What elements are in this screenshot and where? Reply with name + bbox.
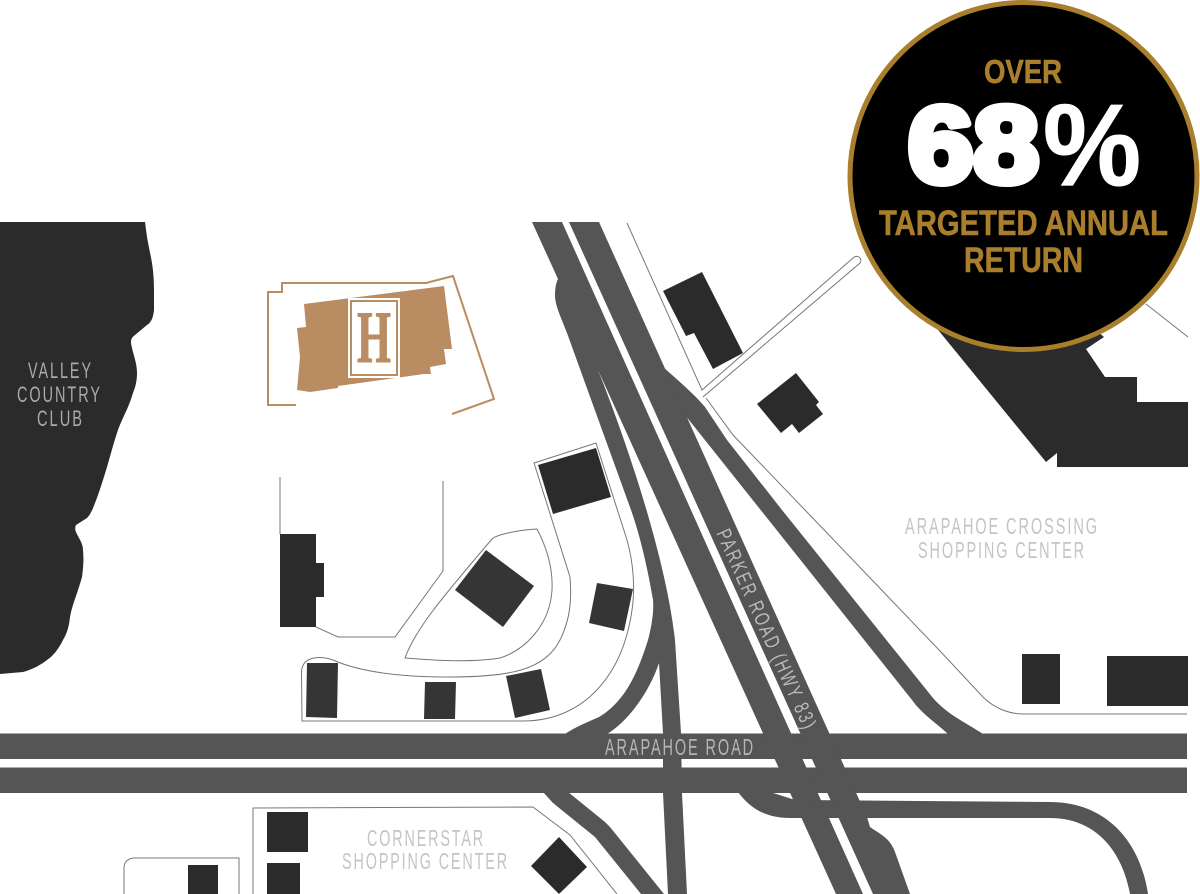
building footprint xyxy=(297,286,452,392)
building Cornerstar 1 xyxy=(267,812,308,852)
building lot southeast xyxy=(506,669,550,718)
logo: H badge xyxy=(348,297,400,379)
buildings in curved lot xyxy=(306,550,633,719)
label: Parker Road: PARKER ROAD (HWY 83) xyxy=(711,526,821,734)
road: southeast service road xyxy=(738,792,1148,894)
callout number: 68% xyxy=(908,80,1141,210)
building Cornerstar 2 xyxy=(267,863,300,894)
road: Parker Road east carriageway xyxy=(569,222,910,894)
property: hotel site xyxy=(268,276,494,414)
road: Parker Road west carriageway with ramps xyxy=(532,222,863,894)
label: Arapahoe Crossing Shopping Center: SHOPPING CENTER xyxy=(918,537,1086,563)
label: Cornerstar Shopping Center xyxy=(342,825,509,874)
site outline xyxy=(268,276,494,414)
building north of driveway xyxy=(663,272,743,369)
label: Cornerstar Shopping Center: CORNERSTAR xyxy=(367,825,485,851)
label: Valley Country Club: CLUB xyxy=(37,406,84,431)
road: Arapahoe Road westbound xyxy=(0,768,1187,793)
callout: targeted annual return xyxy=(850,2,1197,350)
callout text: return: RETURN xyxy=(964,241,1083,280)
road network xyxy=(0,222,1187,894)
label: Valley Country Club: VALLEY xyxy=(28,358,93,383)
building Cornerstar diamond xyxy=(531,837,587,894)
road: southwest ramp xyxy=(543,792,664,894)
logo: H badge: H xyxy=(357,297,391,379)
building lot southwest xyxy=(306,663,338,718)
road: Arapahoe Road eastbound xyxy=(0,734,1187,759)
callout number: 68%: 68 xyxy=(908,84,1039,205)
callout circle xyxy=(850,2,1197,350)
building lot north xyxy=(538,448,611,514)
label: Cornerstar Shopping Center: SHOPPING CENTER xyxy=(342,848,509,874)
label: Valley Country Club xyxy=(17,358,102,431)
building east 2 xyxy=(1107,656,1188,706)
building east 1 xyxy=(1022,654,1060,704)
road: northeast ramp xyxy=(663,367,983,734)
label: Arapahoe Crossing Shopping Center xyxy=(905,513,1099,563)
callout number: 68%: % xyxy=(1043,80,1141,210)
label: Valley Country Club: COUNTRY xyxy=(17,382,102,407)
label: Arapahoe Road: ARAPAHOE ROAD xyxy=(605,734,755,760)
building island xyxy=(455,550,534,627)
callout text: over: OVER xyxy=(984,53,1062,90)
building lot east xyxy=(589,583,633,631)
building west lot xyxy=(280,534,324,627)
building lot south xyxy=(424,682,456,719)
parcel boundary lines xyxy=(124,223,1188,894)
area: Valley Country Club xyxy=(0,222,154,674)
buildings xyxy=(188,272,1188,894)
building south of driveway xyxy=(757,373,823,433)
building behind callout xyxy=(930,300,1188,467)
building southwest xyxy=(188,865,218,894)
